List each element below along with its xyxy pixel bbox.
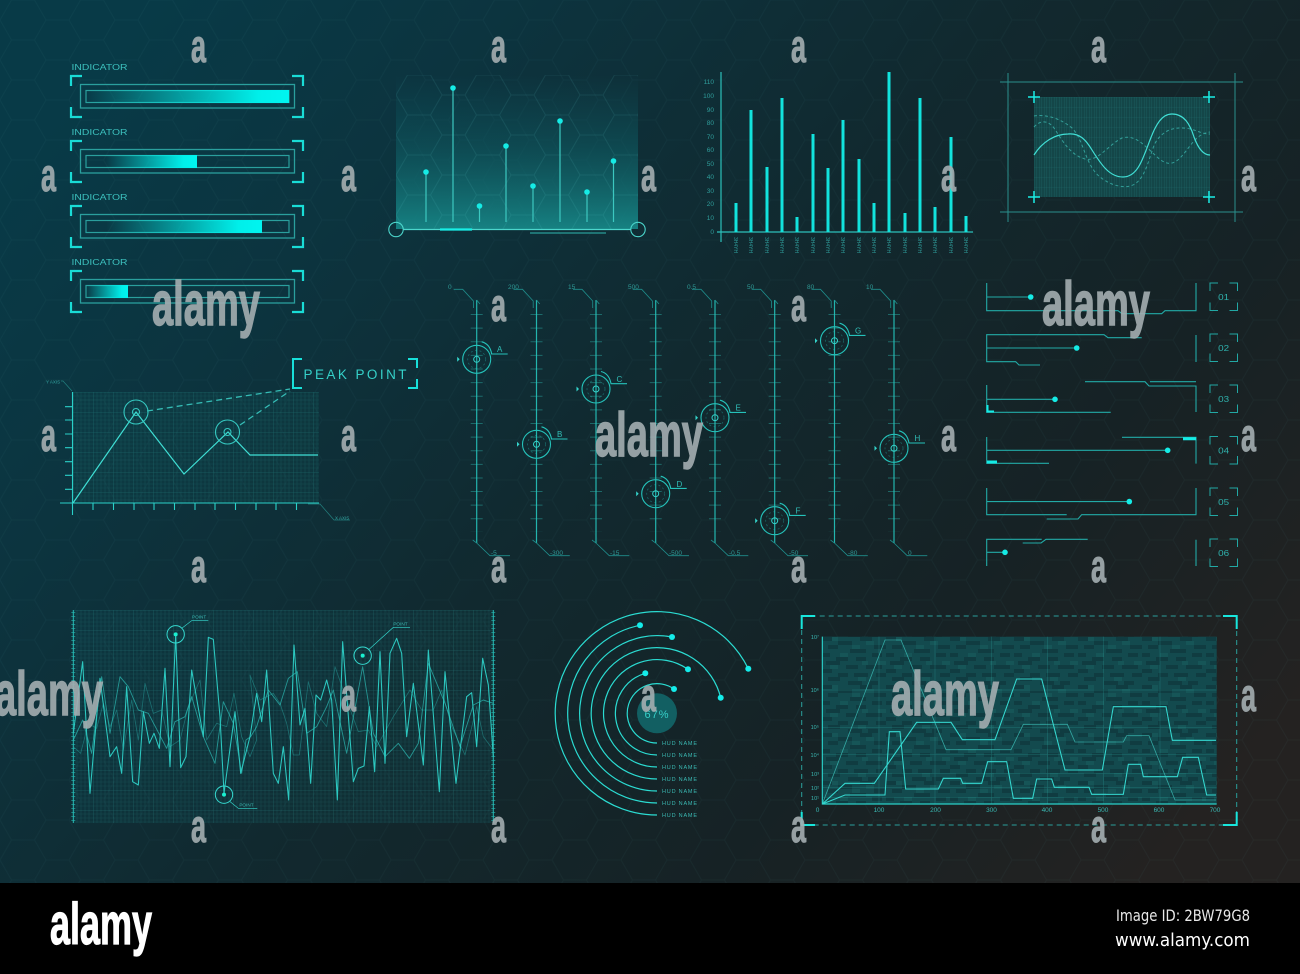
x axis labels: 3H4YH xyxy=(962,237,968,254)
watermarks: a xyxy=(1091,20,1106,72)
x axis labels: 200 xyxy=(930,807,941,814)
x axis labels: 600 xyxy=(1154,807,1165,814)
indicator 1 xyxy=(71,63,303,117)
x axis labels: 0 xyxy=(816,807,820,814)
arc names: HUD NAME xyxy=(662,741,697,747)
arc names: HUD NAME xyxy=(662,801,697,807)
row 03: 03 xyxy=(1218,395,1230,404)
x axis labels: 3H4YH xyxy=(732,237,738,254)
row 02 xyxy=(987,334,1238,365)
panel: sliders xyxy=(448,284,927,557)
slider top values: 50 xyxy=(747,284,755,291)
y axis labels xyxy=(703,79,714,236)
x axis labels: 3H4YH xyxy=(870,237,876,254)
row 04: 04 xyxy=(1218,446,1230,456)
y axis labels: 10³ xyxy=(811,772,819,778)
watermarks: a xyxy=(941,409,956,461)
panel: lollipop chart xyxy=(389,75,645,237)
indicator 2 xyxy=(71,128,303,182)
slider bottom values: -300 xyxy=(550,550,563,557)
x axis labels: 3H4YH xyxy=(916,237,922,254)
watermarks: alamy xyxy=(152,270,260,339)
indicator 1: INDICATOR xyxy=(72,63,128,72)
bars xyxy=(736,72,966,232)
watermarks: a xyxy=(941,149,956,201)
arc names xyxy=(662,741,697,819)
arc names: HUD NAME xyxy=(662,753,697,759)
watermarks: a xyxy=(341,149,356,201)
slider bottom values: -50 xyxy=(789,550,799,557)
knob letters: H xyxy=(914,434,920,443)
point callouts: POINT xyxy=(393,621,408,626)
watermarks: a xyxy=(641,669,656,721)
knob letters: A xyxy=(497,345,503,354)
grid xyxy=(73,610,493,823)
y axis labels: 100 xyxy=(703,93,714,100)
watermarks: a xyxy=(641,149,656,201)
line xyxy=(73,412,318,503)
solid curve xyxy=(1034,114,1210,177)
footer band xyxy=(0,883,1300,974)
row 06 xyxy=(987,539,1238,566)
x axis labels: 3H4YH xyxy=(839,237,845,254)
slider top values: 0.5 xyxy=(687,284,696,291)
y axis labels: 30 xyxy=(707,188,714,195)
peak point label: PEAK POINT xyxy=(304,367,406,382)
watermarks: alamy xyxy=(891,660,999,729)
x axis labels: 3H4YH xyxy=(885,237,891,254)
watermarks: a xyxy=(491,279,506,331)
watermarks: a xyxy=(491,800,506,852)
watermarks: a xyxy=(1241,409,1256,461)
knob letters: E xyxy=(736,404,741,412)
watermarks: a xyxy=(791,20,806,72)
indicator 3 xyxy=(71,193,303,247)
watermarks: a xyxy=(491,540,506,592)
watermarks: a xyxy=(191,800,206,852)
x axis labels: 3H4YH xyxy=(931,237,937,254)
watermarks: alamy xyxy=(0,660,103,729)
y axis labels: 90 xyxy=(707,107,714,114)
indicator 2: INDICATOR xyxy=(72,128,128,137)
y axis labels: 20 xyxy=(707,201,714,208)
panel: noise line chart xyxy=(73,610,493,823)
y axis labels: 110 xyxy=(704,79,714,86)
axis labels: X AXIS xyxy=(335,516,349,520)
panel: bar chart xyxy=(703,72,973,254)
x axis labels: 500 xyxy=(1098,807,1109,814)
x axis labels: 3H4YH xyxy=(901,237,907,254)
slider bottom values xyxy=(491,550,912,557)
slider bottom values: -80 xyxy=(848,550,858,557)
slider bottom values: -15 xyxy=(610,550,620,557)
corner crosses xyxy=(1028,91,1215,203)
y axis labels: 80 xyxy=(707,120,714,127)
y axis labels: 10⁷ xyxy=(811,634,819,641)
dashed leaders xyxy=(147,389,290,425)
slider top values: 500 xyxy=(628,284,639,291)
concentric arcs xyxy=(555,612,748,815)
panel: wave chart xyxy=(1000,73,1243,222)
y axis labels: 50 xyxy=(707,161,714,168)
knob letters: B xyxy=(557,430,562,439)
grid xyxy=(73,392,319,503)
slider knobs xyxy=(457,323,925,535)
panel: indicators xyxy=(71,63,303,312)
x axis labels xyxy=(816,807,1221,814)
axis labels: Y AXIS xyxy=(46,380,60,384)
watermarks: a xyxy=(41,149,56,201)
slider top values: 0 xyxy=(448,284,452,291)
x axis labels: 100 xyxy=(874,807,885,814)
watermarks: alamy xyxy=(1042,270,1150,339)
knob letters: D xyxy=(676,480,682,489)
arc names: HUD NAME xyxy=(662,789,697,795)
lollipop stems xyxy=(426,88,614,222)
arc names: HUD NAME xyxy=(662,813,697,819)
y axis labels: 10⁴ xyxy=(811,752,820,759)
axes xyxy=(60,392,319,515)
row 03 xyxy=(987,382,1238,412)
signal lines xyxy=(73,635,493,800)
center percentage disc xyxy=(637,693,677,733)
panel: numbered lines xyxy=(987,283,1238,566)
arc end dots xyxy=(637,622,751,701)
row 01 xyxy=(987,283,1238,314)
point callouts xyxy=(167,615,410,808)
slider bottom values: -5 xyxy=(491,550,497,557)
x axis labels: 700 xyxy=(1210,807,1221,814)
x axis labels: 3H4YH xyxy=(855,237,861,254)
site url: www.alamy.com xyxy=(1115,930,1250,951)
y axis labels: 10 xyxy=(707,215,714,222)
x axis labels: 3H4YH xyxy=(793,237,799,254)
knob letters: C xyxy=(616,375,622,384)
watermarks: alamy xyxy=(595,401,703,470)
grid panel xyxy=(1034,97,1210,197)
peak markers xyxy=(124,400,240,444)
watermarks: a xyxy=(491,20,506,72)
slider bottom values: 0 xyxy=(908,550,912,557)
watermarks: a xyxy=(191,540,206,592)
row 04 xyxy=(987,436,1238,464)
dashed frame xyxy=(802,616,1237,825)
y axis labels: 0 xyxy=(710,229,714,236)
watermarks: a xyxy=(1091,800,1106,852)
y axis labels: 40 xyxy=(707,174,714,181)
y axis labels: 10² xyxy=(811,786,819,792)
watermarks: a xyxy=(791,800,806,852)
slider top values xyxy=(448,284,874,291)
x axis labels: 3H4YH xyxy=(778,237,784,254)
point callouts: POINT xyxy=(239,802,254,807)
watermarks: a xyxy=(1241,149,1256,201)
y axis labels xyxy=(811,634,820,802)
center percentage disc: 67% xyxy=(644,709,670,721)
watermarks: a xyxy=(1241,669,1256,721)
x axis labels: 400 xyxy=(1042,807,1053,814)
footer logo: alamy xyxy=(50,892,152,957)
row 05 xyxy=(987,488,1238,519)
outer frame lines xyxy=(1000,73,1243,222)
point callouts: POINT xyxy=(192,615,206,620)
x axis labels: 3H4YH xyxy=(947,237,953,254)
panel: log chart xyxy=(802,616,1237,825)
row 01: 01 xyxy=(1218,293,1230,302)
panel: peak point chart xyxy=(46,359,417,520)
row 06: 06 xyxy=(1218,549,1230,558)
indicator 4 xyxy=(71,258,303,312)
y axis labels: 10⁶ xyxy=(811,687,819,694)
watermarks: a xyxy=(791,279,806,331)
slider bottom values: -500 xyxy=(669,550,682,557)
x axis labels: 3H4YH xyxy=(763,237,769,254)
slider scales xyxy=(454,289,927,556)
lollipop dots xyxy=(423,85,616,209)
axes xyxy=(717,72,973,242)
slider top values: 200 xyxy=(508,284,519,291)
slider top values: 10 xyxy=(866,284,874,291)
knob letters xyxy=(497,326,920,516)
indicator 3: INDICATOR xyxy=(72,193,128,202)
watermarks: a xyxy=(41,409,56,461)
x axis labels: 3H4YH xyxy=(809,237,815,254)
row 02: 02 xyxy=(1218,344,1230,353)
y axis labels: 10¹ xyxy=(811,796,819,802)
side rulers xyxy=(73,610,493,823)
slider top values: 15 xyxy=(568,284,576,291)
row 05: 05 xyxy=(1218,498,1230,507)
y axis labels: 60 xyxy=(707,147,714,154)
watermarks: a xyxy=(791,540,806,592)
x axis labels xyxy=(732,237,968,254)
slider bottom values: -0.5 xyxy=(729,550,741,557)
plot grid and lines xyxy=(822,637,1217,804)
axis labels xyxy=(46,380,350,520)
watermarks: a xyxy=(1091,540,1106,592)
hexagon gradient backdrop xyxy=(396,75,638,229)
x axis labels: 300 xyxy=(986,807,997,814)
dashed curves xyxy=(1034,116,1210,187)
watermarks: a xyxy=(341,409,356,461)
x axis labels: 3H4YH xyxy=(824,237,830,254)
slider top values: 80 xyxy=(807,284,815,291)
x axis labels: 3H4YH xyxy=(747,237,753,254)
y axis labels: 70 xyxy=(707,134,714,141)
knob letters: G xyxy=(855,326,861,336)
indicator 4: INDICATOR xyxy=(72,258,128,267)
image id: Image ID: 2BW79G8 xyxy=(1116,906,1250,925)
baseline with end circles xyxy=(389,222,645,237)
textured plot area xyxy=(822,637,1217,804)
peak point label xyxy=(293,359,417,388)
arc names: HUD NAME xyxy=(662,777,697,783)
panel: radial arcs xyxy=(555,612,751,819)
arc names: HUD NAME xyxy=(662,765,697,771)
knob letters: F xyxy=(796,506,800,516)
y axis labels: 10⁵ xyxy=(811,724,819,731)
watermarks: a xyxy=(341,669,356,721)
watermarks: a xyxy=(191,20,206,72)
